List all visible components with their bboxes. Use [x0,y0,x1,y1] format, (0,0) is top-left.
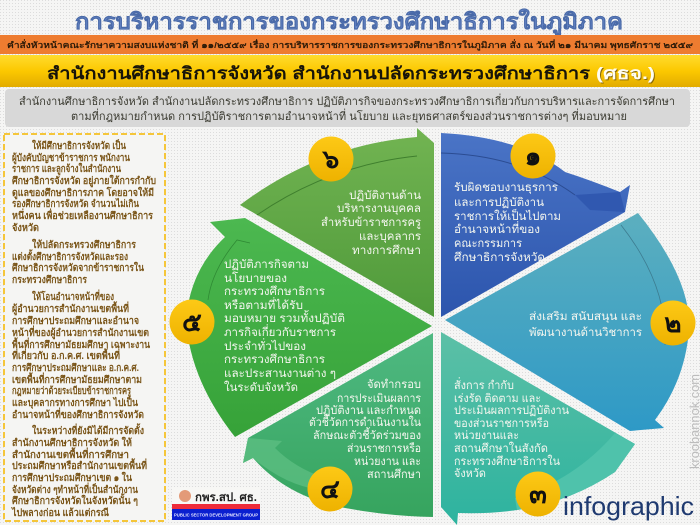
segment 5: green: ในระดับจังหวัด [224,381,298,394]
panel: provincial education notes: การศึกษาประถมศึกษาและอำนาจ [12,315,139,327]
panel: provincial education notes: การศึกษาประถมศึกษาเขต ๑ ใน [12,471,132,484]
segment 5: green: กระทรวงศึกษาธิการ [224,285,325,298]
panel: provincial education notes: กระทรวงศึกษาธิการ [12,274,88,286]
panel: provincial education notes: ผู้อำนวยการสำนักงานเขตพื้นที่ [12,301,129,316]
number badge 3 [516,472,560,516]
segment 6: olive green: สำหรับข้าราชการครู [321,216,421,229]
segment 5: green: มอบหมาย รวมทั้งปฏิบัติ [224,310,345,325]
segment 5: green: หรือตามที่ได้รับ [224,297,303,312]
segment 1: blue: ราชการให้เป็นไปตาม [454,208,561,223]
segment 5: green: ภารกิจเกี่ยวกับราชการ [224,324,336,339]
panel: provincial education notes: หน้าที่ของผู้อำนวยการสำนักงานเขต [12,325,149,340]
summary box [5,89,690,127]
panel: provincial education notes: ดูแลของศึกษาธิการภาค โดยอาจให้มี [12,186,154,200]
panel: provincial education notes: จังหวัดต่าง ๆทำหน้าที่เป็นสำนักงาน [12,482,138,496]
order reference banner [0,35,700,54]
segment 4: sea green: ส่วนราชการหรือ [347,442,421,455]
segment 4: sea green: จัดทำกรอบ [367,378,421,391]
segment 4: sea green: ลักษณะตัวชี้วัดร่วมของ [313,427,421,442]
segment 1: blue: คณะกรรมการ [454,238,522,250]
segment 4: sea green: การประเมินผลการ [337,392,421,405]
summary box: ตามที่กฎหมายกำหนด การปฏิบัติราชการตามอำนาจหน้าที่ นโยบาย และยุทธศาสตร์ของส่วนราชการต่างๆ ที่มอบหมาย [71,108,627,123]
number badge 2: ๒ [664,308,682,338]
segment 3: turquoise: จังหวัด [454,468,486,480]
segment 3: turquoise: เร่งรัด ติดตาม และ [454,392,541,405]
segment 3: turquoise: ประเมินผลการปฏิบัติงาน [454,404,569,417]
heading band: สำนักงานศึกษาธิการจังหวัด สำนักงานปลัดกระทรวงศึกษาธิการ [47,64,591,83]
title: การบริหารราชการของกระทรวงศึกษาธิการในภูมิภาค [75,8,623,36]
segment 3: turquoise: กระทรวงศึกษาธิการใน [454,455,560,468]
panel: provincial education notes: ราชการ และลูกจ้างในสำนักงาน [12,162,121,176]
segment 4: sea green: ปฏิบัติงาน และกำหนด [316,404,421,417]
panel: provincial education notes: ให้ปลัดกระทรวงศึกษาธิการ [32,238,137,251]
panel: provincial education notes: จังหวัด [12,222,39,234]
segment 4: sea green [243,333,433,517]
panel: provincial education notes: อำนาจหน้าที่ของศึกษาธิการจังหวัด [12,407,144,421]
panel: provincial education notes: ศึกษาธิการจังหวัด อยู่ภายใต้การกำกับ [12,174,156,188]
segment 5: green [186,218,432,437]
heading band: (ศธจ.) [596,64,655,83]
segment 3: turquoise: สั่งการ กำกับ [454,377,514,392]
segment 5: green: ประจำทั่วไปของ [224,338,306,353]
panel: provincial education notes: ให้โอนอำนาจหน้าที่ของ [32,289,114,303]
segment 3: turquoise: หน่วยงานและ [454,430,519,442]
panel: provincial education notes: พื้นที่การศึกษามัธยมศึกษา เฉพาะงาน [12,337,150,351]
panel: provincial education notes: เขตพื้นที่การศึกษามัธยมศึกษาตาม [12,372,142,386]
number badge 1 [510,134,556,178]
segment 6: olive green [240,128,434,317]
panel: provincial education notes: สำนักงานศึกษาธิการจังหวัด ให้ [12,436,132,449]
number badge 2 [650,300,696,346]
panel: provincial education notes: ให้มีศึกษาธิการจังหวัด เป็น [32,138,126,152]
segment 2: teal blue: พัฒนางานด้านวิชาการ [529,326,642,339]
wordmark: infographic: infographic [563,491,694,521]
segment 2: teal blue [445,213,689,431]
panel: provincial education notes: ประถมศึกษาหรือสำนักงานเขตพื้นที่ [12,458,147,472]
panel: provincial education notes: และบุคลากรทางการศึกษา ไปเป็น [12,395,138,409]
segment 5: green: กระทรวงศึกษาธิการ [224,353,325,366]
number badge 3: ๓ [529,479,547,509]
segment 1: blue: อำนาจหน้าที่ของ [454,221,540,236]
panel: provincial education notes: รองศึกษาธิการจังหวัด จำนวนไม่เกิน [12,197,139,210]
number badge 5: ๕ [182,307,202,337]
panel: provincial education notes: ศึกษาธิการจังหวัดจากข้าราชการใน [12,261,144,274]
logo: public sector development group: กพร.สป. ศธ. [195,491,257,504]
panel: provincial education notes: หนึ่งคน เพื่อช่วยเหลืองานศึกษาธิการ [12,208,154,222]
segment 4: sea green: ตัวชี้วัดการดำเนินงานใน [309,414,421,429]
segment 1: blue: รับผิดชอบงานธุรการ [454,181,558,194]
segment 6: olive green: ปฏิบัติงานด้าน [349,189,421,202]
panel: provincial education notes: ศึกษาธิการจังหวัดในจังหวัดนั้น ๆ [12,493,138,507]
segment 3: turquoise: ของส่วนราชการหรือ [454,417,549,430]
summary box: สำนักงานศึกษาธิการจังหวัด สำนักงานปลัดกระทรวงศึกษาธิการ ปฏิบัติภารกิจของกระทรวงศึกษาธิการเกี่ยวกับการบริหารและการจัดการศึกษา [19,93,675,108]
number badge 6: ๖ [322,144,339,174]
panel: provincial education notes: ผู้บังคับบัญชาข้าราชการ พนักงาน [12,152,130,165]
panel: provincial education notes: ไปพลางก่อน แล้วแต่กรณี [11,506,110,519]
number badge 4: ๔ [320,474,340,504]
number badge 4 [308,466,352,512]
segment 4: sea green: หน่วยงาน และ [354,456,421,468]
panel: provincial education notes: แต่งตั้งศึกษาธิการจังหวัดและรอง [12,249,128,263]
number badge 1: ๑ [525,141,541,171]
order reference banner: คำสั่งหัวหน้าคณะรักษาความสงบแห่งชาติ ที่ ๑๑/๒๕๕๙ เรื่อง การบริหารราชการของกระทรวงศึกษาธิการในภูมิภาค สั่ง ณ วันที่ ๒๑ มีนาคม พุทธศักราช ๒๕๕๙ [7,38,693,51]
panel: provincial education notes: ในระหว่างที่ยังมิได้มีการจัดตั้ง [32,423,144,437]
panel: provincial education notes: สำนักงานเขตพื้นที่การศึกษา [12,447,129,461]
segment 6: olive green: และบุคลากร [359,231,421,243]
panel: provincial education notes: กฎหมายว่าด้วยระเบียบข้าราชการครู [12,385,131,398]
segment 5: green: และประสานงานต่าง ๆ [224,368,336,380]
segment 3: turquoise [441,332,635,525]
panel: provincial education notes [4,134,165,521]
segment 4: sea green: สถานศึกษา [367,468,421,481]
segment 6: olive green: ทางการศึกษา [352,244,421,257]
segment 2: teal blue: ส่งเสริม สนับสนุน และ [529,310,642,323]
number badge 6 [308,136,354,182]
segment 1: blue [441,133,630,317]
panel: provincial education notes: ที่เกี่ยวกับ อ.ก.ค.ศ. เขตพื้นที่ [12,348,120,362]
segment 6: olive green: บริหารงานบุคคล [337,202,421,215]
number badge 5 [170,300,214,344]
logo: public sector development group: PUBLIC SECTOR DEVELOPMENT GROUP [174,512,258,518]
segment 3: turquoise: สถานศึกษาในสังกัด [454,442,548,455]
logo: public sector development group [172,487,260,520]
segment 1: blue: และการปฏิบัติงาน [454,196,544,209]
heading band: (ศธจ.) [597,65,656,84]
heading band [0,55,700,87]
segment 5: green: ปฏิบัติภารกิจตาม [224,258,309,271]
segment 1: blue: ศึกษาธิการจังหวัด [454,251,545,264]
panel: provincial education notes: การศึกษาประถมศึกษาและ อ.ก.ค.ศ. [12,362,139,374]
segment 5: green: นโยบายของ [224,271,287,285]
